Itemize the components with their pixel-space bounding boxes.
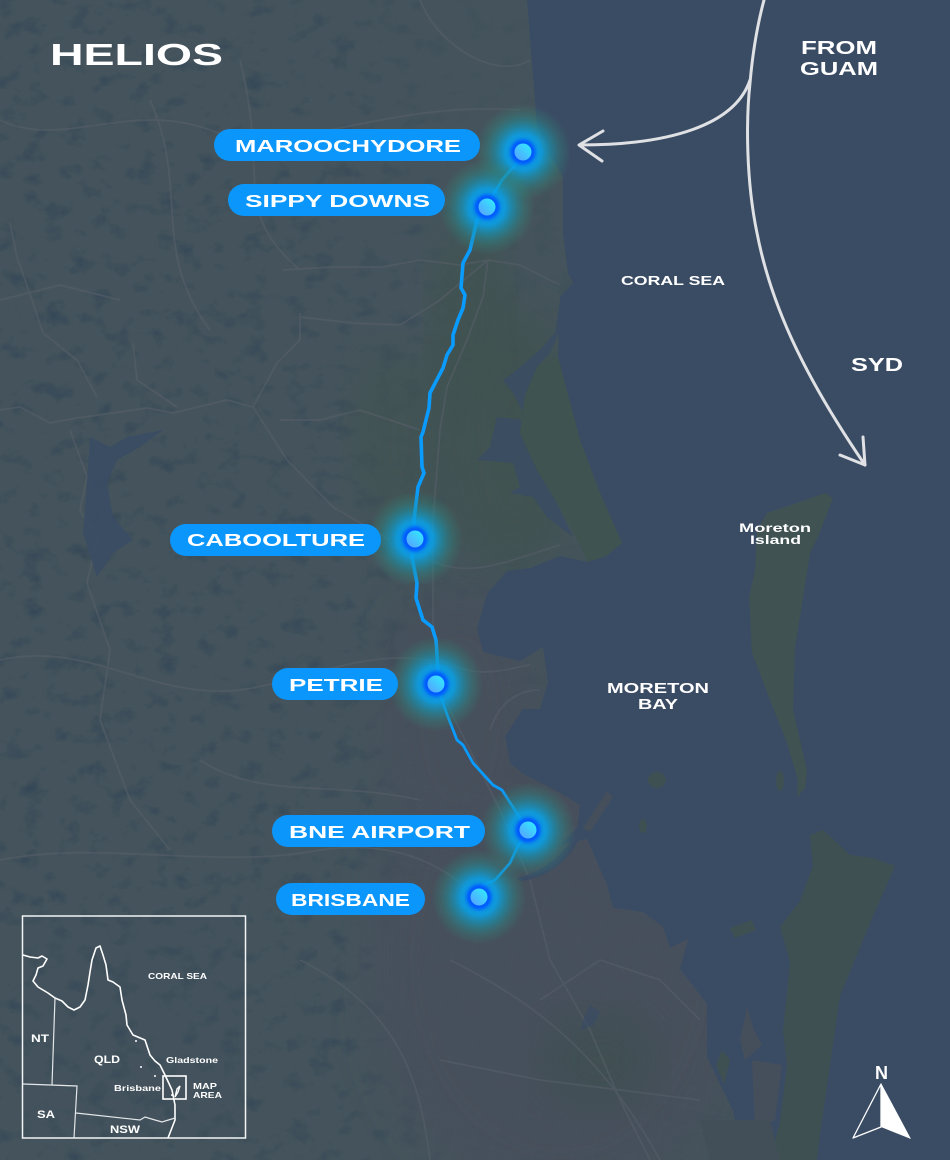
- inset labels: CORAL SEA: [148, 971, 207, 981]
- label: BNE Airport: [272, 815, 485, 847]
- water inlets: [83, 300, 600, 1030]
- arrow: from Guam to Maroochydore: [579, 80, 750, 161]
- text: From Guam: FROM: [801, 38, 877, 58]
- stop marker: Petrie: [388, 636, 484, 732]
- label: Brisbane: BRISBANE: [291, 890, 410, 910]
- stop marker: Maroochydore: [475, 104, 571, 200]
- text: From Guam: [800, 38, 878, 79]
- city dots: [135, 1040, 173, 1096]
- inset labels: NT: [31, 1033, 49, 1045]
- North Stradbroke Island: [770, 830, 895, 1160]
- inset labels: SA: [37, 1109, 55, 1121]
- label: Caboolture: CABOOLTURE: [187, 530, 365, 550]
- label: Maroochydore: [214, 129, 480, 161]
- label: Sippy Downs: [228, 184, 445, 216]
- stop marker: Sippy Downs: [439, 159, 535, 255]
- inset labels: QLD: [94, 1054, 120, 1066]
- inset labels: AREA: [193, 1090, 222, 1100]
- text: Moreton Bay: BAY: [638, 697, 678, 713]
- north arrow: [853, 1063, 911, 1139]
- text: Moreton Island: [739, 521, 811, 547]
- text: Moreton Island: Moreton: [739, 521, 811, 535]
- label: BNE Airport: BNE AIRPORT: [289, 822, 470, 842]
- inset labels: Brisbane: [114, 1083, 161, 1093]
- label: Brisbane: [276, 883, 425, 915]
- text: SYD: SYD: [851, 355, 903, 375]
- inset labels: NSW: [110, 1124, 141, 1136]
- label: Petrie: [272, 668, 398, 700]
- text: Moreton Island: Island: [750, 533, 801, 547]
- text: From Guam: GUAM: [800, 59, 878, 79]
- label: Petrie: PETRIE: [289, 675, 383, 695]
- inset map: [22, 916, 246, 1138]
- text: Moreton Bay: [607, 681, 709, 713]
- route line: [412, 152, 528, 897]
- north arrow: N: [875, 1063, 888, 1083]
- mainland terrain: [0, 0, 735, 1160]
- state borders: [23, 998, 175, 1138]
- label: Caboolture: [170, 524, 381, 556]
- inset labels: [31, 971, 222, 1136]
- inset labels: MAP: [193, 1081, 217, 1091]
- text: Moreton Bay: MORETON: [607, 681, 709, 697]
- Bribie Island: [520, 357, 622, 562]
- stop marker: Caboolture: [367, 491, 463, 587]
- logo: Helios: HELIOS: [50, 37, 223, 72]
- stop marker: Brisbane: [431, 849, 527, 945]
- text: Coral Sea: CORAL SEA: [621, 274, 725, 288]
- map area box: [163, 1076, 186, 1099]
- label: Maroochydore: MAROOCHYDORE: [235, 136, 461, 156]
- inset labels: Gladstone: [166, 1055, 218, 1065]
- label: Sippy Downs: SIPPY DOWNS: [245, 191, 430, 211]
- bay islands: [583, 771, 784, 1160]
- Queensland coastline: [23, 946, 175, 1138]
- Moreton Island: [749, 493, 833, 797]
- arrow: from Guam to Sydney: [748, 0, 865, 465]
- stop marker: BNE Airport: [480, 782, 576, 878]
